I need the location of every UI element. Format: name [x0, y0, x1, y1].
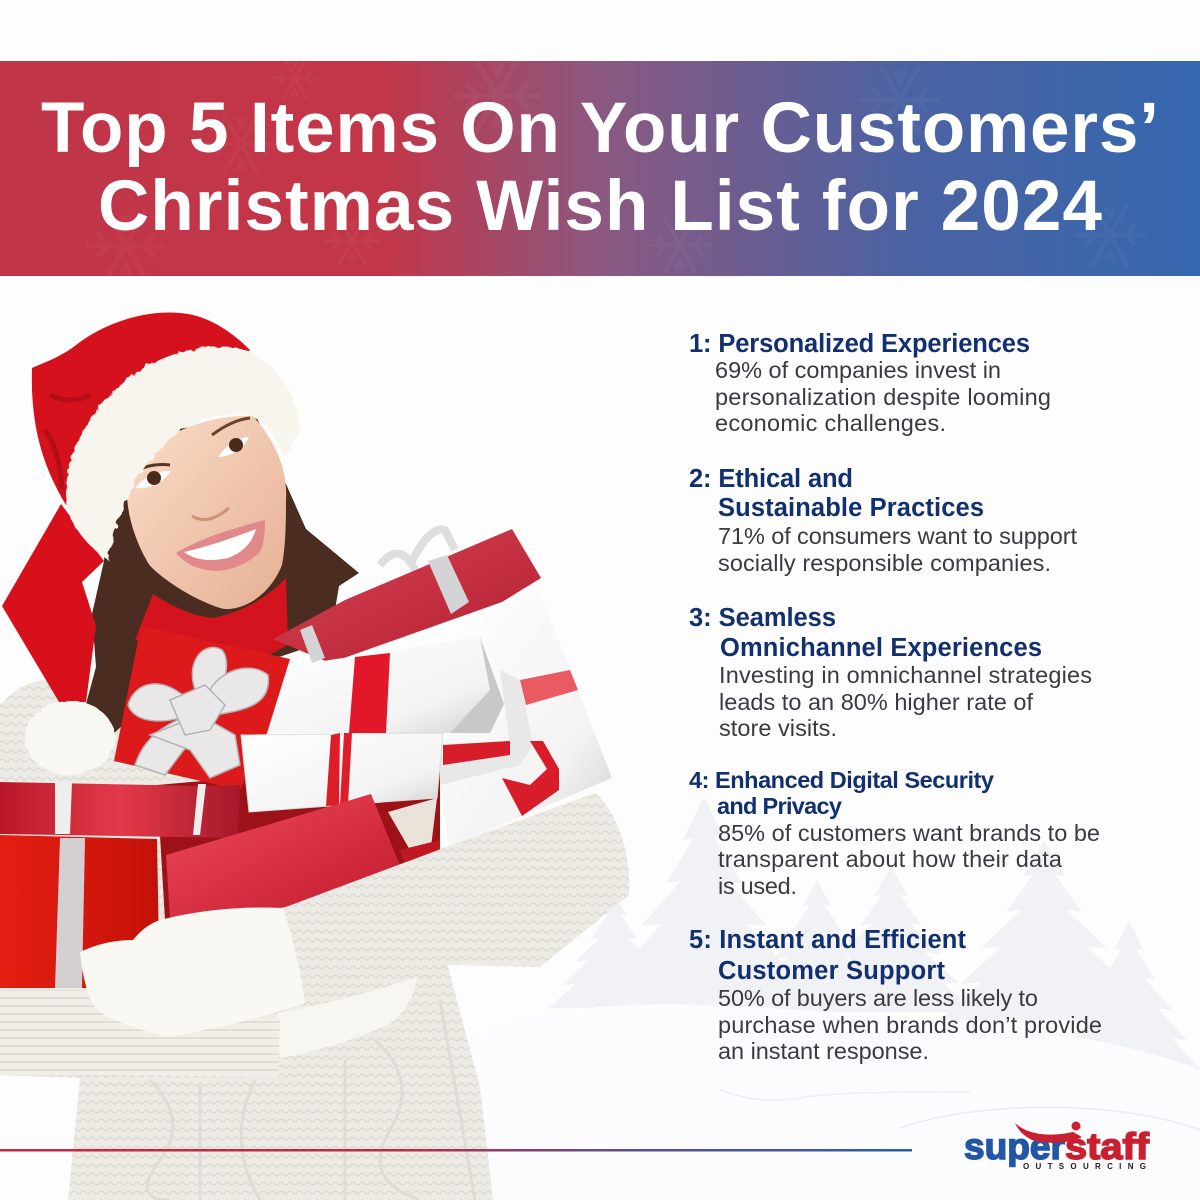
- hat pom-pom: [25, 701, 115, 775]
- smile: [176, 520, 265, 571]
- snowy trees background: [470, 797, 1200, 1200]
- item 5: purchase when brands don’t provide: [718, 1012, 1102, 1038]
- logo: SuperStaff Outsourcing: OUTSOURCING: [1023, 1162, 1146, 1171]
- item 1: 1: Personalized Experiences: [689, 330, 1030, 358]
- face: [127, 416, 286, 609]
- item 2: 2: Ethical and: [689, 465, 853, 493]
- second mitten: [277, 977, 417, 1058]
- mitten: [80, 908, 305, 1037]
- logo: SuperStaff Outsourcing: [900, 1107, 1200, 1171]
- item 3: store visits.: [719, 715, 837, 741]
- sweater cable details: [147, 1000, 475, 1200]
- item 3: leads to an 80% higher rate of: [719, 689, 1033, 715]
- item 1: 69% of companies invest in: [715, 357, 1001, 383]
- scarf: [135, 578, 288, 665]
- header banner: [0, 57, 1200, 280]
- item 2: socially responsible companies.: [718, 550, 1051, 576]
- item 1: economic challenges.: [715, 410, 946, 436]
- title: Top 5 Items On Your Customers’: [41, 89, 1159, 168]
- top red gift: [273, 529, 541, 663]
- item 3: Omnichannel Experiences: [720, 634, 1042, 662]
- item 2: 71% of consumers want to support: [718, 523, 1077, 549]
- right arm sleeve: [283, 793, 629, 1007]
- red centre gift: [166, 794, 405, 918]
- eyes and brows: [126, 418, 250, 520]
- red box bottom left: [0, 835, 159, 988]
- list: five wish list items: [689, 330, 1102, 1064]
- sweater body: [0, 680, 493, 1200]
- title: Christmas Wish List for 2024: [98, 167, 1102, 246]
- logo: SuperStaff Outsourcing: super: [964, 1126, 1065, 1167]
- left forearm sleeve: [0, 990, 280, 1077]
- dark gap behind gifts: [157, 760, 440, 920]
- hat fur trim: [66, 346, 299, 560]
- item 4: 85% of customers want brands to be: [718, 820, 1100, 846]
- item 1: personalization despite looming: [715, 384, 1051, 410]
- item 3: Investing in omnichannel strategies: [719, 662, 1092, 688]
- person with gifts illustration: [0, 312, 629, 1200]
- item 4: and Privacy: [717, 793, 842, 819]
- item 3: [689, 604, 1092, 741]
- santa hat: [32, 312, 250, 505]
- wrapped red gift left: [0, 782, 240, 838]
- back white gift: [430, 590, 612, 847]
- title: [41, 89, 1159, 246]
- item 1: [689, 330, 1051, 436]
- logo: SuperStaff Outsourcing: staff: [1065, 1126, 1150, 1167]
- lower white gift: [241, 733, 443, 855]
- bow: [128, 647, 268, 778]
- item 4: is used.: [718, 873, 797, 899]
- bottom gradient rule: [0, 1149, 912, 1152]
- item 4: transparent about how their data: [718, 846, 1063, 872]
- item 5: 5: Instant and Efficient: [689, 926, 966, 954]
- item 2: [689, 465, 1077, 576]
- item 5: [689, 926, 1102, 1064]
- middle white gift: [267, 637, 559, 816]
- red ribbon loop: [502, 741, 559, 816]
- item 5: an instant response.: [718, 1038, 929, 1064]
- item 2: Sustainable Practices: [718, 494, 984, 522]
- hat tail: [2, 504, 104, 702]
- red gift with silver bow: [114, 626, 290, 790]
- item 5: Customer Support: [718, 957, 946, 985]
- item 3: 3: Seamless: [689, 604, 836, 632]
- item 5: 50% of buyers are less likely to: [718, 985, 1038, 1011]
- item 4: 4: Enhanced Digital Security: [689, 767, 994, 793]
- hair: [86, 418, 359, 737]
- item 4: [689, 767, 1100, 899]
